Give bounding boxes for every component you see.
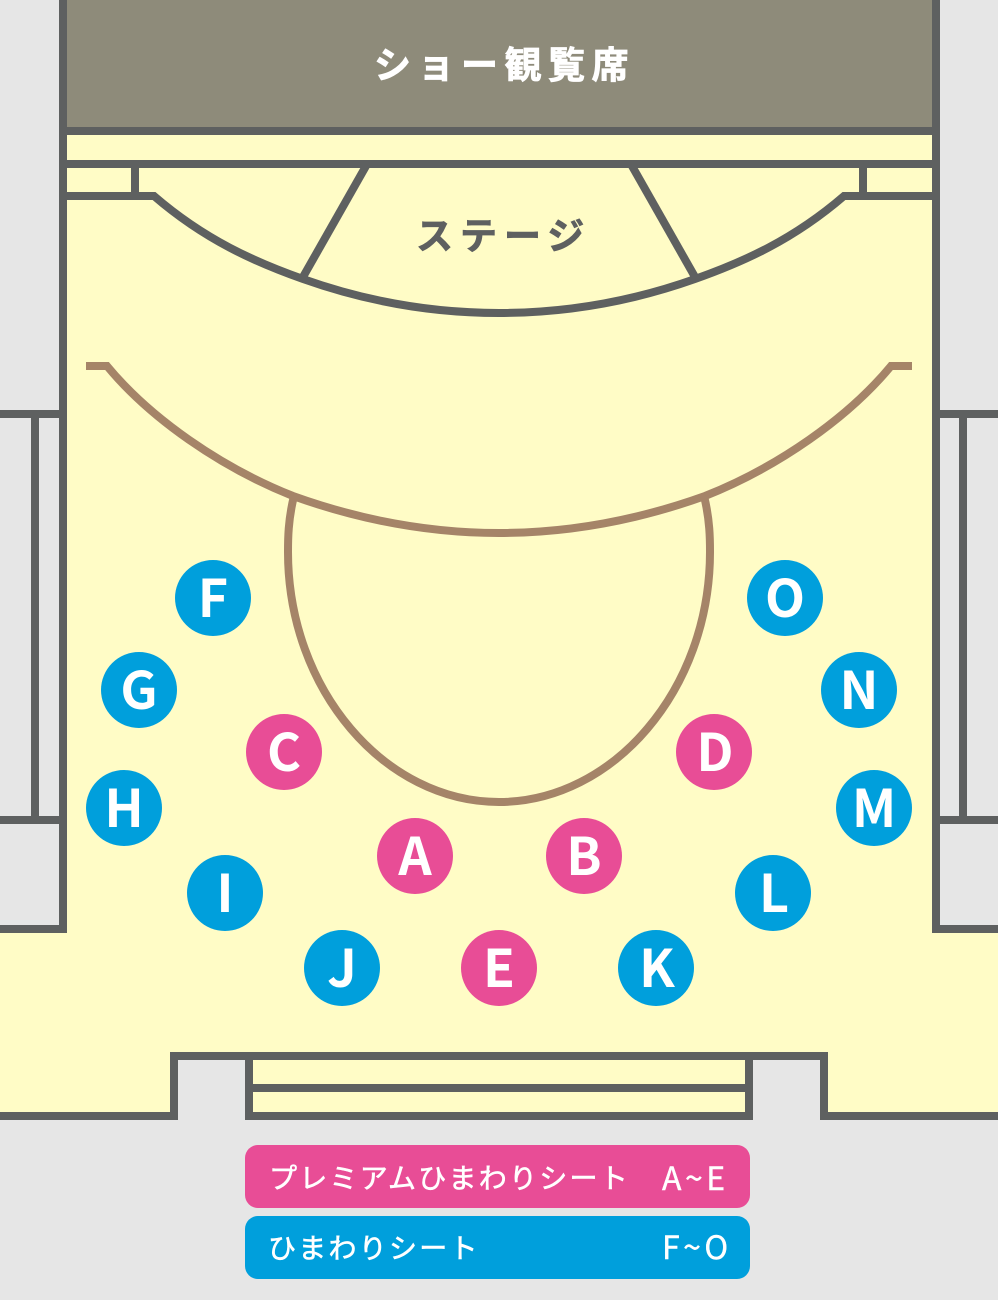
legend: sunflower seats: ひまわりシート (268, 1227, 480, 1267)
legend: premium sunflower seats: A~E (662, 1154, 729, 1200)
seat M: M (852, 767, 896, 842)
seat J: J (327, 927, 357, 1002)
entrance steps (249, 1056, 749, 1116)
sunflower seating boundary (86, 366, 912, 802)
seat L (735, 852, 811, 931)
seat K: K (639, 927, 675, 1002)
seat D: D (696, 711, 734, 786)
seat D (676, 711, 752, 790)
seat I: I (216, 852, 234, 927)
seat C (246, 711, 322, 790)
seat K (618, 927, 694, 1006)
heading: show seating: ショー観覧席 (374, 35, 635, 89)
heading: stage: ステージ (416, 206, 591, 260)
legend: premium sunflower seats: プレミアムひまわりシート (269, 1157, 630, 1197)
seat O (747, 557, 823, 636)
seat N (821, 649, 897, 728)
seat B (546, 815, 622, 894)
seat H: H (104, 767, 144, 842)
seat I (187, 852, 263, 931)
seat A (377, 815, 453, 894)
legend: sunflower seats: F~O (662, 1223, 732, 1269)
seat A: A (397, 815, 432, 890)
legend: premium sunflower seats (245, 1145, 750, 1208)
seat N: N (840, 649, 878, 724)
seat M (836, 767, 912, 846)
seat E (461, 927, 537, 1006)
legend: sunflower seats (245, 1216, 750, 1279)
seat G (101, 649, 177, 728)
show seating area (63, 0, 935, 131)
seat G: G (120, 649, 158, 724)
seat F (175, 557, 251, 636)
seat F: F (198, 557, 228, 632)
seat J (304, 927, 380, 1006)
seat B: B (566, 815, 602, 890)
seat C: C (267, 711, 301, 786)
stage (63, 164, 936, 313)
seat E: E (483, 927, 515, 1002)
seat O: O (765, 557, 805, 632)
seat L: L (759, 852, 789, 927)
seat H (86, 767, 162, 846)
